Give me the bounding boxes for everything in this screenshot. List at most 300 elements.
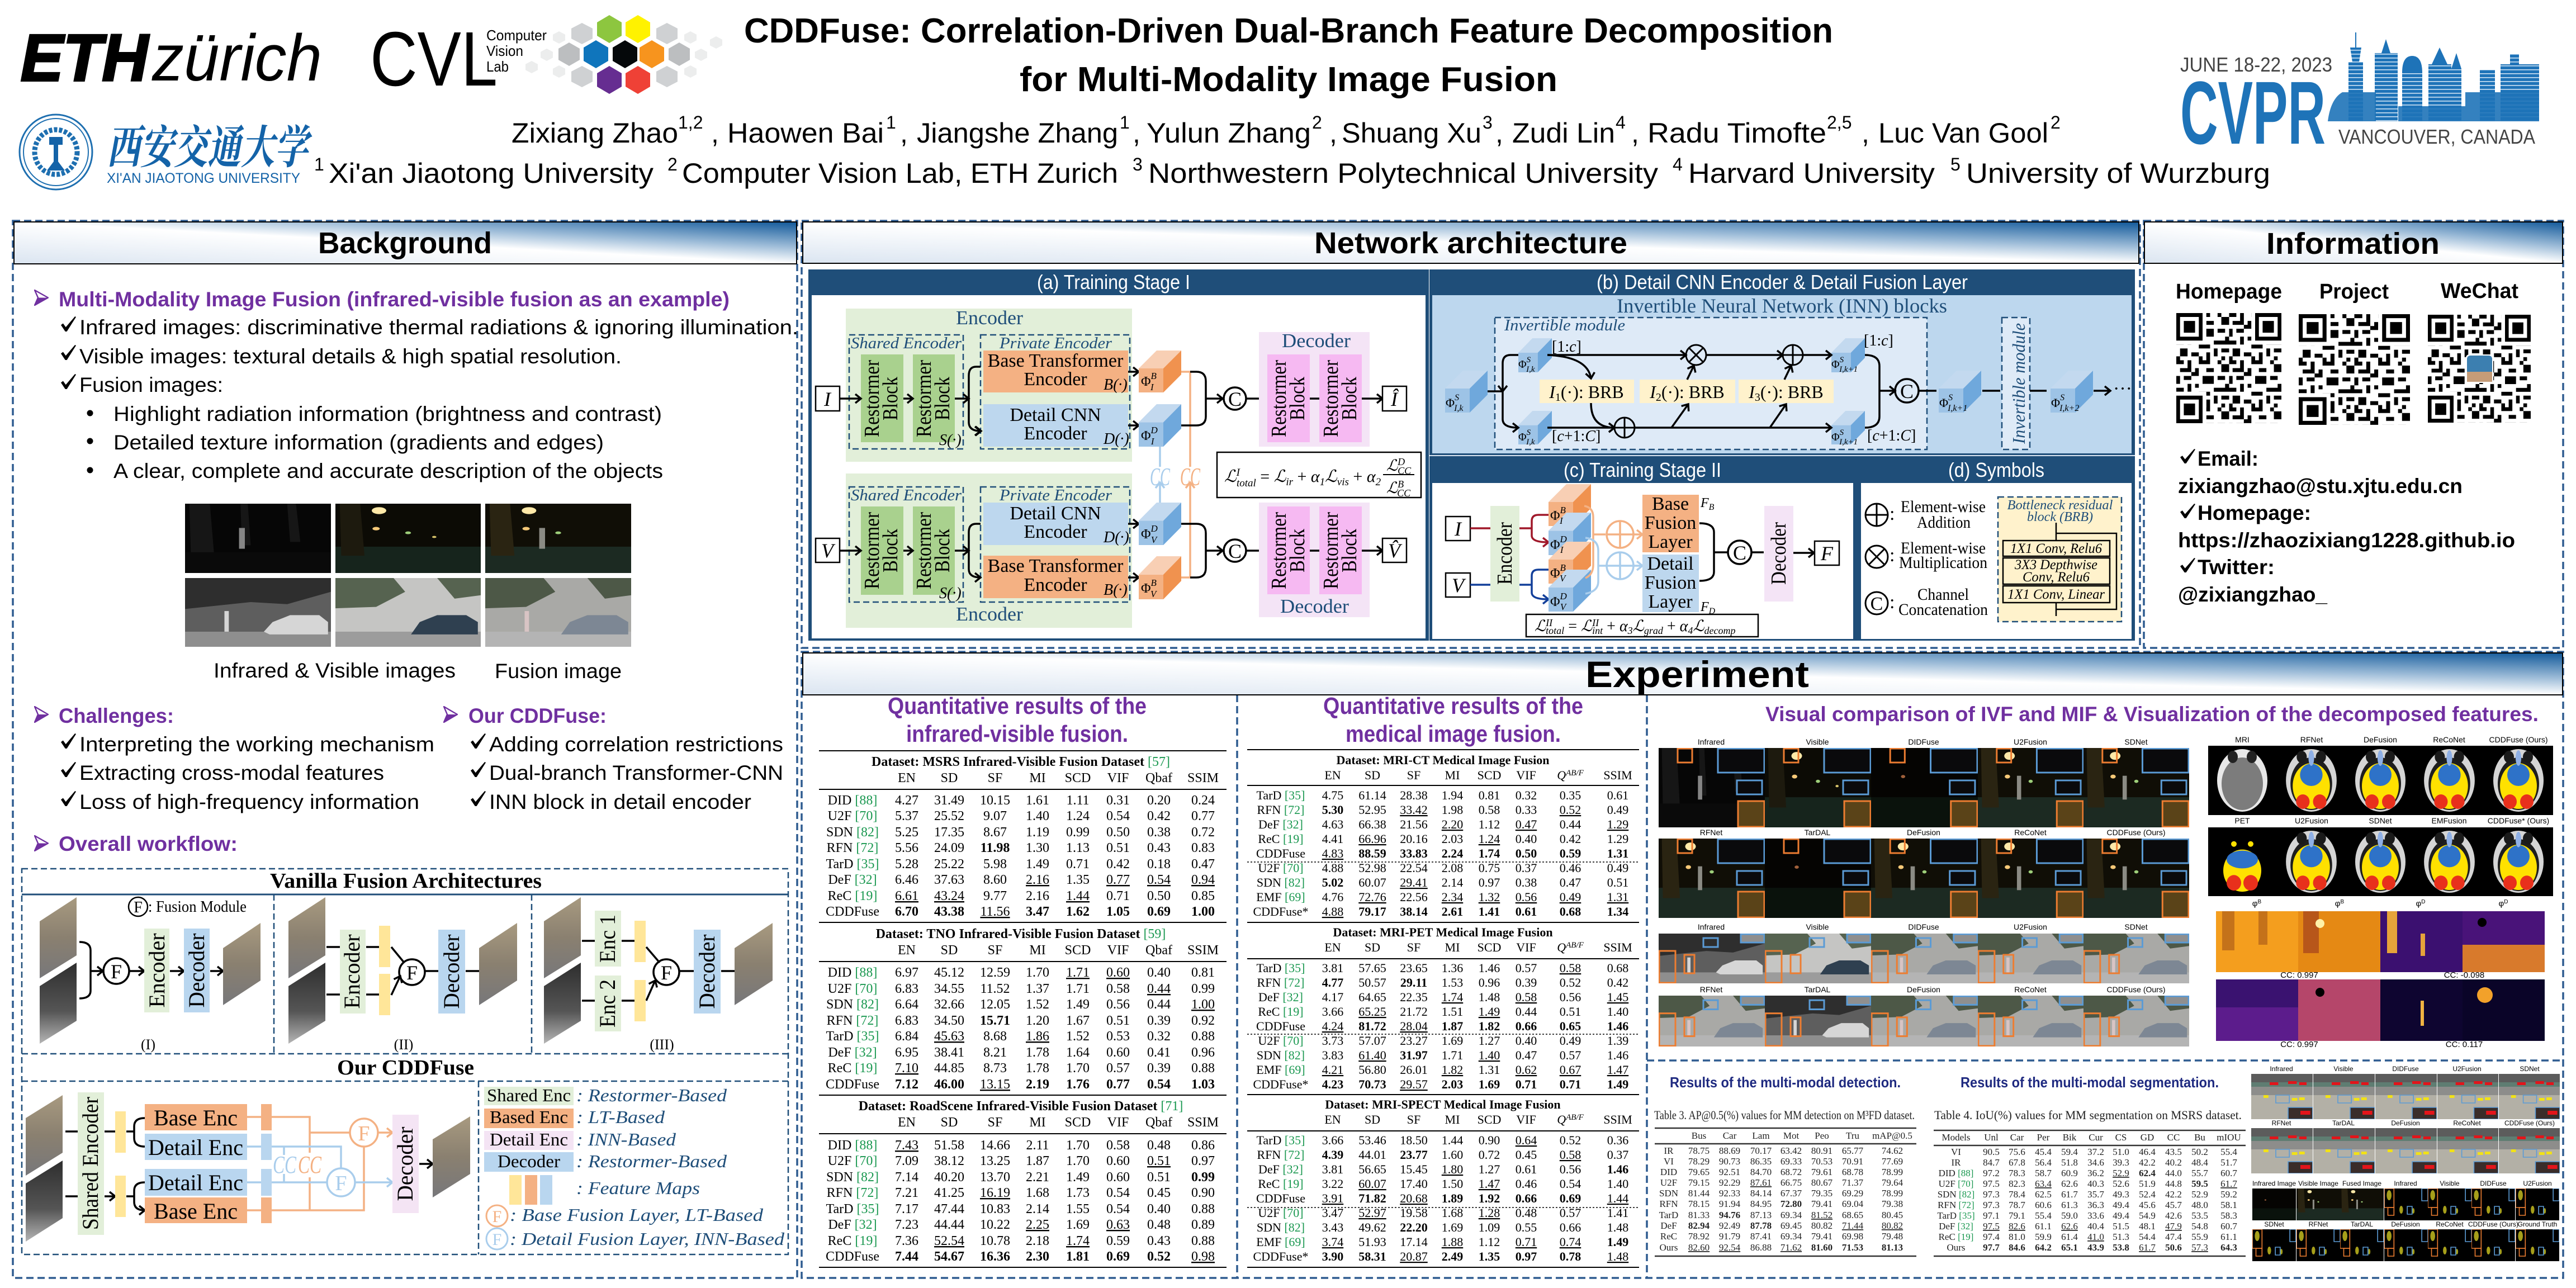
table 4: segmentation: 36.2 bbox=[2087, 1168, 2104, 1178]
text block: multi-modality image fusion bbox=[35, 288, 798, 482]
invertible module diagram: I,k bbox=[1526, 438, 1535, 447]
table: MRI-CT: DeF [32] bbox=[1258, 817, 1303, 831]
table 3: detection: Mot bbox=[1783, 1130, 1799, 1141]
table: TNO dataset: 38.41 bbox=[934, 1045, 964, 1060]
table: MRI-PET: 1.49 bbox=[1479, 1005, 1500, 1019]
table 4: segmentation: 36.3 bbox=[2087, 1200, 2104, 1210]
CVL logo bbox=[370, 15, 722, 102]
authors: 2 bbox=[1312, 112, 1322, 132]
table 4: segmentation: 35.7 bbox=[2087, 1189, 2104, 1200]
table: MRI-SPECT: 17.40 bbox=[1400, 1177, 1428, 1191]
encoder I: Restormer bbox=[912, 360, 936, 437]
table: TNO dataset: 0.32 bbox=[1147, 1029, 1171, 1044]
table: TNO dataset: 6.64 bbox=[895, 997, 918, 1012]
decoder I: Decoder bbox=[1282, 330, 1351, 352]
encoder I bbox=[846, 307, 1132, 462]
heading: infrared-visible results: Quantitative results of the bbox=[888, 693, 1147, 719]
stage II diagram: Detail bbox=[1647, 553, 1694, 574]
table: MRI-CT: 4.41 bbox=[1322, 832, 1343, 846]
table: MRI-PET: 1.69 bbox=[1479, 1077, 1500, 1091]
table: MSRS dataset: 0.77 bbox=[1191, 809, 1215, 823]
table: MRI-PET: 1.40 bbox=[1479, 1048, 1500, 1062]
table 4: segmentation: 60.7 bbox=[2220, 1221, 2237, 1232]
table: MSRS dataset: 11.56 bbox=[980, 905, 1010, 919]
stage II diagram: Φ bbox=[1550, 509, 1560, 523]
INN chain: Φ bbox=[1446, 396, 1455, 410]
image grid: detection results: ReCoNet bbox=[2453, 1119, 2481, 1127]
authors: , bbox=[1329, 117, 1337, 149]
table: RoadScene dataset: 1.74 bbox=[1066, 1234, 1090, 1248]
table: MSRS dataset: 0.72 bbox=[1191, 825, 1215, 840]
table: MRI-SPECT: 0.69 bbox=[1560, 1191, 1581, 1205]
table: MRI-PET: 0.96 bbox=[1479, 976, 1500, 989]
invertible module diagram: I bbox=[1549, 382, 1556, 402]
table: TNO dataset: SD bbox=[941, 943, 958, 958]
table: MRI-SPECT: 0.36 bbox=[1607, 1133, 1628, 1147]
image grid: IVF night scene: U2Fusion bbox=[2014, 737, 2047, 746]
table: TNO dataset: 0.88 bbox=[1191, 1061, 1215, 1076]
table: TNO dataset: 0.40 bbox=[1147, 965, 1171, 980]
table 4: segmentation: 52.9 bbox=[2191, 1189, 2208, 1200]
diagram: architecture II: Encoder bbox=[339, 935, 364, 1008]
table: MRI-CT: 0.47 bbox=[1560, 875, 1581, 889]
table: MRI-SPECT: 18.50 bbox=[1400, 1133, 1428, 1147]
ETH Zurich logo: ETH bbox=[21, 21, 150, 95]
table: MRI-CT: 0.47 bbox=[1516, 817, 1537, 831]
table: RoadScene dataset: 0.88 bbox=[1191, 1202, 1215, 1216]
table: MRI-PET: 3.81 bbox=[1322, 961, 1343, 975]
table: MSRS dataset: 25.52 bbox=[934, 809, 964, 823]
table: MSRS dataset: VIF bbox=[1107, 771, 1129, 785]
table: RoadScene dataset: 1.49 bbox=[1066, 1170, 1090, 1185]
table: RoadScene dataset: SSIM bbox=[1187, 1115, 1219, 1130]
cubes and labels: image V features: Φ bbox=[1141, 527, 1151, 542]
table 3: detection: 87.13 bbox=[1750, 1210, 1772, 1220]
table: RoadScene dataset: 47.44 bbox=[934, 1202, 964, 1216]
image grid: detection results: DIDFuse bbox=[2392, 1065, 2419, 1073]
stage II diagram: V bbox=[1560, 602, 1568, 612]
table: MRI-SPECT: SDN [82] bbox=[1257, 1220, 1305, 1234]
table: MSRS dataset: 0.18 bbox=[1147, 857, 1171, 872]
table 3: detection: 79.41 bbox=[1811, 1199, 1832, 1209]
table: TNO dataset: ReC [19] bbox=[828, 1061, 877, 1076]
table: TNO dataset: 8.68 bbox=[983, 1029, 1007, 1044]
diagram: architecture II bbox=[288, 897, 517, 1053]
table 3: detection: 78.29 bbox=[1688, 1156, 1710, 1167]
table: MRI-SPECT: 3.91 bbox=[1322, 1191, 1343, 1205]
table: MRI-CT: MI bbox=[1445, 768, 1460, 782]
affiliations: 5 bbox=[1950, 154, 1961, 174]
table: MRI-PET: 1.49 bbox=[1607, 1077, 1628, 1091]
loss formula stage II: total bbox=[1546, 625, 1564, 636]
table 3: detection: TarD bbox=[1659, 1210, 1678, 1220]
table: RoadScene dataset: 1.70 bbox=[1066, 1138, 1090, 1153]
loss formula stage I: ℒ bbox=[1386, 480, 1398, 497]
table: TNO dataset: 0.57 bbox=[1106, 1061, 1130, 1076]
contact details: Homepage: bbox=[2198, 501, 2311, 524]
table 3: detection: 69.29 bbox=[1842, 1188, 1863, 1199]
table: MRI-SPECT: 20.68 bbox=[1400, 1191, 1428, 1205]
table: TNO dataset: 1.67 bbox=[1066, 1014, 1090, 1028]
heading: visual comparison: Visual comparison of IVF and MIF & Visualization of the decomposed features. bbox=[1765, 703, 2539, 726]
table: MRI-SPECT: 0.71 bbox=[1516, 1235, 1537, 1249]
table: RoadScene dataset: 2.11 bbox=[1026, 1138, 1049, 1153]
encoder V: Encoder bbox=[956, 603, 1023, 625]
table 4: segmentation: SDN [82] bbox=[1938, 1189, 1974, 1200]
panel title: (d) Symbols bbox=[1948, 458, 2044, 481]
diagram: CDDFuse workflow: F bbox=[358, 1122, 370, 1145]
table: MRI-CT: 2.24 bbox=[1442, 846, 1463, 860]
INN chain: S bbox=[2060, 393, 2064, 402]
table: MSRS dataset: 5.25 bbox=[895, 825, 918, 840]
diagram: architecture I: Decoder bbox=[184, 934, 209, 1007]
authors: Zixiang Zhao bbox=[512, 117, 678, 149]
table: MRI-CT: 38.14 bbox=[1400, 905, 1428, 918]
table: TNO dataset: 1.78 bbox=[1026, 1045, 1049, 1060]
loss formula stage II: 4 bbox=[1688, 625, 1693, 636]
table: MRI-CT: CDDFuse* bbox=[1253, 905, 1309, 918]
table: MRI-SPECT: 1.41 bbox=[1607, 1206, 1628, 1220]
table: MRI-PET: AB/F bbox=[1565, 941, 1584, 950]
image grid: medical fusion: PET bbox=[2234, 816, 2250, 825]
stage II diagram: Fusion bbox=[1645, 513, 1696, 533]
table: MRI-SPECT: 0.66 bbox=[1516, 1191, 1537, 1205]
table 3: detection: IR bbox=[1664, 1145, 1674, 1156]
image grid: detection results: DeFusion bbox=[2391, 1119, 2420, 1127]
table 3: detection: 71.44 bbox=[1842, 1220, 1864, 1231]
decoder V: C bbox=[1228, 540, 1242, 562]
table 3: detection: 80.67 bbox=[1811, 1177, 1833, 1188]
authors: Jiangshe Zhang bbox=[917, 117, 1118, 149]
table 4: segmentation: 51.8 bbox=[2061, 1157, 2078, 1168]
table: MRI-SPECT: 58.31 bbox=[1358, 1249, 1386, 1263]
diagram: architecture II: F bbox=[406, 962, 418, 984]
table: MRI-SPECT: 0.54 bbox=[1560, 1177, 1581, 1191]
table: MRI-CT bbox=[1247, 750, 1639, 918]
stage II diagram: D bbox=[1560, 534, 1568, 544]
image grid: medical fusion: MRI bbox=[2235, 735, 2250, 744]
table: MRI-PET: 0.57 bbox=[1516, 961, 1537, 975]
image grid: IVF street scene: RFNet bbox=[1700, 985, 1722, 994]
invertible module diagram: S bbox=[1527, 356, 1531, 364]
table: MRI-PET: 1.47 bbox=[1607, 1063, 1628, 1077]
table 3: detection: Ours bbox=[1659, 1242, 1678, 1253]
table: RoadScene dataset: 40.20 bbox=[934, 1170, 964, 1185]
table: MRI-PET: 0.58 bbox=[1516, 990, 1537, 1004]
table: RoadScene dataset: 10.22 bbox=[980, 1218, 1010, 1232]
table: RoadScene dataset: 0.88 bbox=[1191, 1234, 1215, 1248]
table 3: detection: 87.41 bbox=[1750, 1231, 1772, 1242]
bottleneck residual block: block (BRB) bbox=[2027, 510, 2093, 524]
encoder I: Restormer bbox=[860, 360, 884, 437]
encoder V: Block bbox=[931, 529, 954, 572]
table: MRI-PET: 4.21 bbox=[1322, 1063, 1343, 1077]
image grid: IVF night scene: Infrared bbox=[1698, 737, 1725, 746]
text block: multi-modality image fusion: Detailed texture information (gradients and edges) bbox=[113, 431, 604, 454]
bottleneck residual block bbox=[1998, 497, 2122, 622]
table 3: detection: 90.73 bbox=[1719, 1156, 1740, 1167]
table: MSRS dataset: TarD [35] bbox=[826, 857, 879, 872]
image grid: segmentation results: RFNet bbox=[2309, 1220, 2328, 1228]
table: TNO dataset: SSIM bbox=[1187, 943, 1219, 958]
table: TNO dataset: 13.15 bbox=[980, 1077, 1010, 1092]
stage II diagram: I bbox=[1454, 518, 1462, 540]
table: RoadScene dataset: 0.51 bbox=[1147, 1154, 1171, 1168]
image grid: infrared, visible and fusion examples bbox=[185, 504, 631, 647]
INN chain: I,k+1 bbox=[1947, 404, 1967, 413]
symbol legend: Addition bbox=[1917, 513, 1971, 532]
table: MRI-SPECT: 1.48 bbox=[1607, 1220, 1628, 1234]
table: RoadScene dataset: VIF bbox=[1107, 1115, 1129, 1130]
table: MRI-CT: 1.24 bbox=[1479, 832, 1500, 846]
encoder V: Shared Encoder bbox=[851, 486, 962, 504]
table: RoadScene dataset: 7.14 bbox=[895, 1170, 918, 1185]
table: MRI-PET: EN bbox=[1324, 940, 1341, 954]
loss formula stage II: grad bbox=[1644, 625, 1664, 636]
image captions: Infrared & Visible images bbox=[214, 659, 456, 682]
table: MRI-PET: 1.48 bbox=[1479, 990, 1500, 1004]
loss formula stage I: CC bbox=[1398, 465, 1412, 476]
table: MRI-SPECT: 23.77 bbox=[1400, 1148, 1428, 1162]
table: TNO dataset: 1.52 bbox=[1026, 997, 1049, 1012]
table 4: segmentation: 82.6 bbox=[2009, 1221, 2025, 1232]
authors: 1 bbox=[1120, 112, 1130, 132]
table: MRI-PET: 0.42 bbox=[1607, 976, 1628, 989]
table: MRI-CT: 0.35 bbox=[1560, 788, 1581, 802]
table: MSRS dataset: 25.22 bbox=[934, 857, 964, 872]
invertible module diagram: Φ bbox=[1518, 358, 1527, 371]
table 3: detection: 69.34 bbox=[1781, 1231, 1802, 1242]
table 3: detection: 86.88 bbox=[1750, 1242, 1772, 1253]
poster title bbox=[744, 12, 1833, 99]
table: TNO dataset: 0.60 bbox=[1106, 965, 1130, 980]
table: TNO dataset: 0.51 bbox=[1106, 1014, 1130, 1028]
table: TNO dataset: SCD bbox=[1065, 943, 1091, 958]
table 4: segmentation: ReC [19] bbox=[1939, 1232, 1973, 1242]
table 4: segmentation: 62.5 bbox=[2035, 1189, 2052, 1200]
table: MRI-PET: EMF [69] bbox=[1256, 1063, 1305, 1077]
table: TNO dataset: 0.77 bbox=[1106, 1077, 1130, 1092]
cubes and labels: image V features: Φ bbox=[1141, 581, 1151, 596]
table: MRI-SPECT: EN bbox=[1324, 1112, 1341, 1126]
table 3: detection: 69.98 bbox=[1842, 1231, 1863, 1242]
table: MRI-CT: 52.95 bbox=[1358, 803, 1386, 817]
cubes and labels: image I features: Φ bbox=[1141, 429, 1151, 443]
table: MSRS dataset: 2.16 bbox=[1026, 889, 1049, 903]
invertible module diagram: 2 bbox=[1656, 391, 1661, 404]
table: MRI-PET bbox=[1247, 922, 1639, 1091]
INN chain: Invertible module bbox=[2009, 323, 2029, 444]
CVPR 2023 logo bbox=[2180, 32, 2539, 163]
loss formula stage I: vis bbox=[1337, 476, 1349, 488]
table: TNO dataset: 0.96 bbox=[1191, 1045, 1215, 1060]
table 4: segmentation: 58.7 bbox=[2035, 1168, 2052, 1178]
table: MRI-PET: 0.40 bbox=[1516, 1034, 1537, 1048]
stage II diagram: B bbox=[1560, 562, 1566, 573]
table: MSRS dataset: 1.24 bbox=[1066, 809, 1090, 823]
diagram: architecture II: (II) bbox=[394, 1036, 413, 1053]
table: MRI-SPECT: 0.78 bbox=[1560, 1249, 1581, 1263]
legend: CDDFuse components: F bbox=[493, 1208, 501, 1226]
table: MRI-SPECT: 20.87 bbox=[1400, 1249, 1428, 1263]
table: RoadScene dataset: 0.51 bbox=[1147, 1170, 1171, 1185]
table 3: detection: RFN bbox=[1659, 1199, 1678, 1209]
table 4: segmentation: 49.4 bbox=[2113, 1210, 2129, 1221]
table: MRI-CT: 1.98 bbox=[1442, 803, 1463, 817]
table 4: segmentation: 51.9 bbox=[2139, 1178, 2156, 1189]
table: MRI-PET: 3.83 bbox=[1322, 1048, 1343, 1062]
table 4: segmentation: 84.6 bbox=[2009, 1242, 2025, 1253]
table: TNO dataset: 0.54 bbox=[1147, 1077, 1171, 1092]
authors: Zudi Lin bbox=[1512, 117, 1615, 149]
table: MRI-SPECT: 1.44 bbox=[1607, 1191, 1628, 1205]
stage II diagram: Φ bbox=[1550, 566, 1560, 581]
table 4: segmentation: 43.9 bbox=[2087, 1242, 2104, 1253]
table: MRI-CT: 72.76 bbox=[1358, 890, 1386, 904]
bottleneck residual block: Conv, Relu6 bbox=[2023, 570, 2090, 585]
table: TNO dataset: 44.85 bbox=[934, 1061, 964, 1076]
table: MSRS dataset: 17.35 bbox=[934, 825, 964, 840]
table 4: segmentation: 44.8 bbox=[2165, 1178, 2182, 1189]
arrows: encoder V bbox=[840, 524, 1139, 577]
table: RoadScene dataset: 2.18 bbox=[1026, 1234, 1049, 1248]
table 4: segmentation: 97.5 bbox=[1983, 1178, 2000, 1189]
table: MRI-PET: 65.25 bbox=[1358, 1005, 1386, 1019]
table: MSRS dataset: SDN [82] bbox=[826, 825, 879, 840]
symbol legend: Element-wise bbox=[1901, 498, 1986, 516]
table: RoadScene dataset: 10.83 bbox=[980, 1202, 1010, 1216]
table: MRI-PET: CDDFuse* bbox=[1253, 1077, 1309, 1091]
feature visualization maps: φ bbox=[2416, 899, 2421, 908]
image grid: medical fusion: ReCoNet bbox=[2433, 735, 2465, 744]
table: MRI-PET: 0.71 bbox=[1516, 1077, 1537, 1091]
table 4: segmentation: 58.3 bbox=[2220, 1210, 2237, 1221]
table 4: segmentation: 59.5 bbox=[2191, 1178, 2208, 1189]
table: MRI-CT: 0.68 bbox=[1560, 905, 1581, 918]
table: MRI-CT: SF bbox=[1407, 768, 1420, 782]
table 4: segmentation: 40.3 bbox=[2087, 1178, 2104, 1189]
table: RoadScene dataset: 1.73 bbox=[1066, 1186, 1090, 1200]
affiliations: Xi'an Jiaotong University bbox=[329, 158, 654, 189]
loss formula stage I: α bbox=[1367, 467, 1376, 486]
table 4: segmentation: 53.5 bbox=[2191, 1210, 2208, 1221]
table 3: detection: 81.60 bbox=[1811, 1242, 1832, 1253]
image grid: IVF street scene: CDDFuse (Ours) bbox=[2106, 985, 2166, 994]
loss formula stage II: II bbox=[1545, 617, 1553, 628]
table 3: detection: 84.14 bbox=[1750, 1188, 1772, 1199]
table: RoadScene dataset: DeF [32] bbox=[828, 1218, 877, 1232]
table 4: segmentation: 37.2 bbox=[2087, 1147, 2104, 1157]
table: MRI-CT: U2F [70] bbox=[1258, 861, 1304, 875]
table: MRI-CT: 5.30 bbox=[1322, 803, 1343, 817]
contact details: Email: bbox=[2198, 447, 2258, 470]
table: MRI-PET: ReC [19] bbox=[1258, 1005, 1304, 1019]
table 4: segmentation: mIOU bbox=[2217, 1132, 2241, 1143]
table 3: detection: 68.72 bbox=[1781, 1167, 1802, 1177]
table: MRI-SPECT: 51.93 bbox=[1358, 1235, 1386, 1249]
loss formula stage II: α bbox=[1680, 618, 1688, 635]
loss formula stage I: D bbox=[1397, 456, 1405, 467]
table: MSRS dataset: CDDFuse bbox=[826, 905, 879, 919]
table: MRI-SPECT: 19.58 bbox=[1400, 1206, 1428, 1220]
INN chain: Φ bbox=[1939, 396, 1948, 410]
heading: Network architecture bbox=[803, 222, 2139, 263]
table 3: detection: 81.13 bbox=[1882, 1242, 1903, 1253]
table 3: detection: 87.61 bbox=[1750, 1177, 1772, 1188]
table: RoadScene dataset: 0.69 bbox=[1106, 1249, 1130, 1264]
table 4: segmentation: 64.3 bbox=[2220, 1242, 2237, 1253]
table: MSRS dataset: 5.28 bbox=[895, 857, 918, 872]
table 3: detection: Car bbox=[1723, 1130, 1737, 1141]
table: MRI-CT: Dataset: MRI-CT Medical Image Fusion bbox=[1337, 753, 1549, 767]
table: TNO dataset: 15.71 bbox=[980, 1014, 1010, 1028]
table: TNO dataset: VIF bbox=[1107, 943, 1129, 958]
table: MRI-SPECT: 1.49 bbox=[1607, 1235, 1628, 1249]
table: MRI-CT: 4.83 bbox=[1322, 846, 1343, 860]
table: MRI-SPECT: 0.52 bbox=[1560, 1133, 1581, 1147]
affiliations: Northwestern Polytechnical University bbox=[1148, 158, 1658, 189]
table: MRI-CT: 5.02 bbox=[1322, 875, 1343, 889]
table: MRI-CT: 66.38 bbox=[1358, 817, 1386, 831]
table: MRI-CT: 2.61 bbox=[1442, 905, 1463, 918]
table: MRI-CT: 1.31 bbox=[1607, 890, 1628, 904]
encoder V: D(·) bbox=[1103, 529, 1129, 546]
table 3: detection: DeF bbox=[1660, 1220, 1677, 1231]
heading: medical results bbox=[1323, 693, 1583, 747]
image grid: IVF night scene: CDDFuse (Ours) bbox=[2106, 828, 2166, 837]
cubes and labels: image V features bbox=[1139, 503, 1181, 599]
table: TNO dataset: 8.73 bbox=[983, 1061, 1007, 1076]
table: MRI-PET: 22.35 bbox=[1400, 990, 1428, 1004]
table: RoadScene dataset: SF bbox=[988, 1115, 1002, 1130]
table: MRI-PET: 1.31 bbox=[1479, 1063, 1500, 1077]
encoder V: Restormer bbox=[860, 512, 884, 589]
table: MSRS dataset: 0.99 bbox=[1066, 825, 1090, 840]
table: MRI-CT: 0.51 bbox=[1607, 875, 1628, 889]
table 4: segmentation: 75.6 bbox=[2009, 1147, 2025, 1157]
table: MRI-SPECT: 3.81 bbox=[1322, 1162, 1343, 1176]
table: MRI-SPECT: 0.64 bbox=[1516, 1133, 1537, 1147]
table 4: segmentation: 50.2 bbox=[2191, 1147, 2208, 1157]
encoder I: Detail CNN bbox=[1010, 405, 1101, 425]
diagram: architecture I: F bbox=[111, 960, 122, 983]
encoder I: D(·) bbox=[1103, 430, 1129, 448]
INN chain: S bbox=[1455, 393, 1459, 402]
decoder V: Restormer bbox=[1319, 512, 1343, 589]
table 4: segmentation: 59.2 bbox=[2220, 1189, 2237, 1200]
image captions: Fusion image bbox=[495, 660, 622, 683]
affiliations: Harvard University bbox=[1688, 158, 1935, 189]
loss formula stage II: 3 bbox=[1627, 625, 1633, 636]
text block: our CDDFuse: Our CDDFuse: bbox=[468, 704, 607, 727]
table: MRI-SPECT: 0.55 bbox=[1516, 1220, 1537, 1234]
table: MRI-PET: 0.57 bbox=[1560, 1048, 1581, 1062]
table: MSRS dataset: SCD bbox=[1065, 771, 1091, 785]
loss formula stage II bbox=[1526, 614, 1758, 637]
table 4: segmentation: 54.9 bbox=[2139, 1210, 2156, 1221]
table: MSRS dataset: RFN [72] bbox=[827, 841, 878, 855]
panel title: (c) Training Stage II bbox=[1564, 458, 1721, 481]
feature visualization maps: φ bbox=[2499, 899, 2504, 908]
contact details: zixiangzhao@stu.xjtu.edu.cn bbox=[2178, 475, 2463, 498]
affiliations: Computer Vision Lab, ETH Zurich bbox=[682, 158, 1118, 189]
encoder V: S(·) bbox=[939, 585, 962, 602]
table: MSRS dataset: 0.71 bbox=[1066, 857, 1090, 872]
loss formula stage I: α bbox=[1311, 467, 1320, 486]
table: MRI-CT: 0.56 bbox=[1516, 890, 1537, 904]
table 4: segmentation: 59.9 bbox=[2035, 1232, 2052, 1242]
image grid: segmentation results: Ground Truth bbox=[2518, 1220, 2557, 1228]
